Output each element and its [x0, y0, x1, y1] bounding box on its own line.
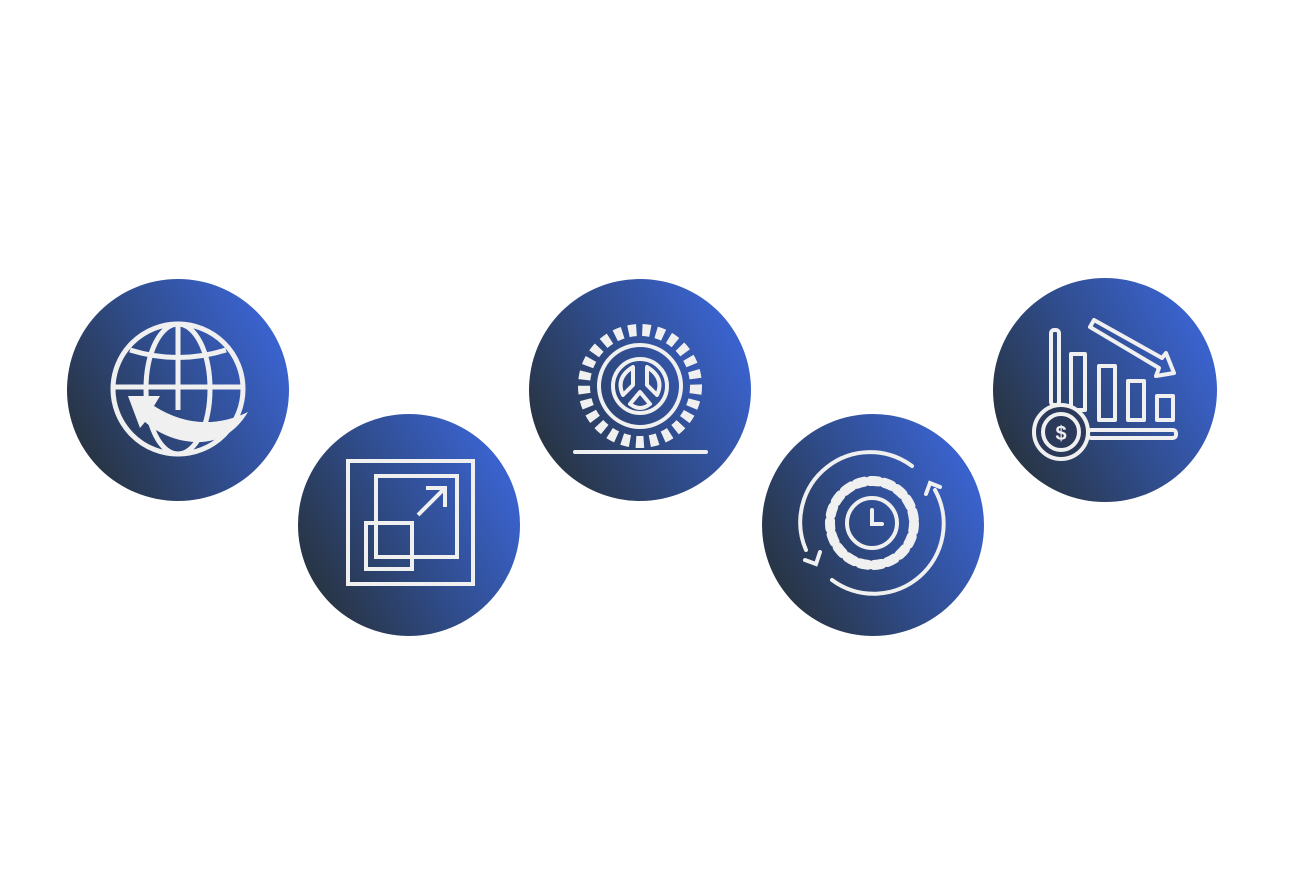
icon circle 5: declining chart with coin: $ [1055, 423, 1067, 445]
icon circle 5: declining chart with coin [993, 278, 1217, 502]
icon circle 1: globe [67, 279, 289, 501]
icon circle 2: resize [298, 414, 520, 636]
icon circle 4: gear clock cycle [762, 414, 984, 636]
icon circle 3: gear with peace symbol [529, 279, 751, 501]
